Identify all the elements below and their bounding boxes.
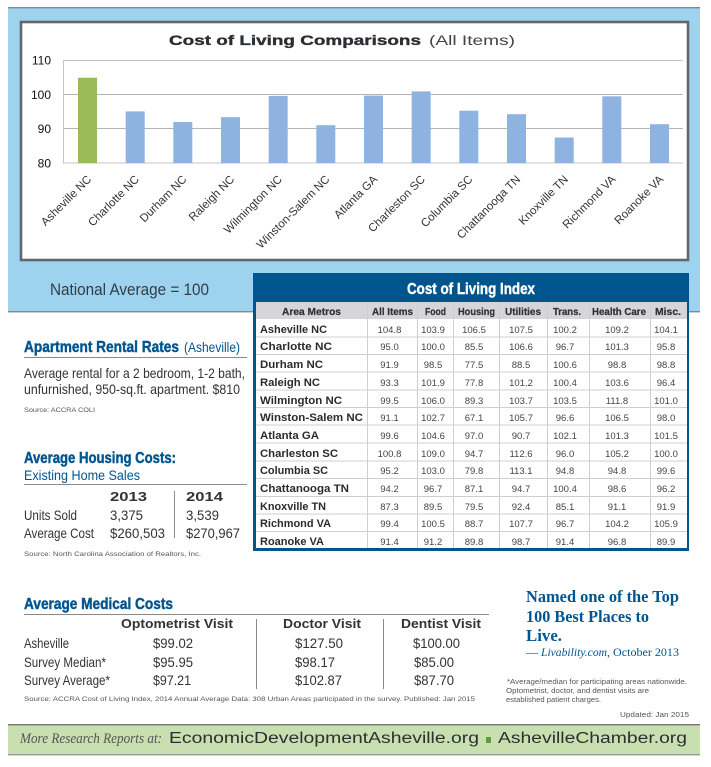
row: Knoxville TN — [260, 501, 675, 513]
chart grid lines — [63, 60, 683, 163]
row: Atlanta GA: 101.5 — [654, 431, 678, 442]
row: Roanoke VA: 96.8 — [608, 537, 626, 548]
row: Atlanta GA: 102.1 — [553, 431, 577, 442]
national average note: National Average = 100 — [50, 280, 209, 299]
row: Charleston SC: 100.8 — [378, 449, 401, 460]
row: Atlanta GA: 101.3 — [605, 431, 629, 442]
y axis labels: 100 — [31, 88, 51, 102]
footer link: chamber: AshevilleChamber.org — [498, 730, 687, 747]
row: Atlanta GA: 104.6 — [421, 431, 445, 442]
medical row: Asheville: $100.00 — [413, 635, 460, 651]
heading: average housing costs — [24, 450, 176, 483]
row: Wilmington NC: 99.5 — [380, 396, 399, 407]
row: Chattanooga TN: 98.6 — [608, 484, 626, 495]
heading: apartment rental rates: (Asheville) — [184, 339, 240, 355]
callout: top 100 best places: — — [525, 645, 539, 659]
row: Richmond VA: 105.9 — [654, 519, 678, 530]
y axis labels: 110 — [32, 54, 51, 68]
row: Chattanooga TN: 94.7 — [512, 484, 530, 495]
row: Raleigh NC: Raleigh NC — [260, 377, 320, 389]
row: Raleigh NC: 103.6 — [605, 378, 629, 389]
x axis city labels: Charleston SC — [366, 174, 428, 235]
x axis city labels: Winston-Salem NC — [255, 174, 332, 251]
row: Atlanta GA: 99.6 — [380, 431, 399, 442]
footnote: Optometrist, doctor, and dentist visits are — [506, 688, 649, 695]
row: Roanoke VA: 91.2 — [424, 537, 442, 548]
x axis city labels: Wilmington NC — [222, 174, 285, 236]
x axis city labels: Asheville NC — [39, 174, 94, 229]
heading: average housing costs: Existing Home Sales — [24, 467, 140, 483]
table column headers: Health Care — [592, 306, 646, 318]
chart title: Cost of Living Comparisons — [169, 33, 421, 48]
row: Charlotte NC: 106.6 — [509, 342, 533, 353]
row: Wilmington NC: 101.0 — [654, 396, 678, 407]
row: Roanoke VA: 91.4 — [380, 537, 399, 548]
row: Richmond VA: 99.4 — [380, 519, 399, 530]
housing source: Source: North Carolina Association of Realtors, Inc. — [24, 551, 201, 558]
medical table headers: Optometrist Visit — [121, 616, 234, 631]
row: Asheville NC: 104.1 — [654, 325, 678, 336]
row: Atlanta GA — [260, 430, 678, 442]
x axis city labels: Charlotte NC — [86, 174, 142, 229]
row: Chattanooga TN: 87.1 — [465, 484, 483, 495]
row: Wilmington NC: Wilmington NC — [260, 395, 342, 407]
row: Wilmington NC: 103.7 — [509, 396, 533, 407]
row: Charleston SC: 94.7 — [465, 449, 483, 460]
medical row: survey average — [24, 672, 454, 688]
callout: top 100 best places: Livability.com — [540, 645, 607, 659]
medical row: Asheville: $99.02 — [153, 635, 193, 651]
medical row: survey average: $87.70 — [414, 672, 454, 688]
row: Durham NC: 98.8 — [657, 360, 675, 371]
row: Charleston SC: Charleston SC — [260, 448, 338, 460]
rental source: Source: ACCRA COLI — [24, 407, 95, 414]
row: Knoxville TN: 91.1 — [608, 502, 626, 513]
housing table: 2013 — [110, 489, 147, 504]
row: Richmond VA: 104.2 — [605, 519, 629, 530]
row: Atlanta GA: 97.0 — [465, 431, 483, 442]
row: Atlanta GA: 90.7 — [512, 431, 530, 442]
row: Charleston SC: 112.6 — [509, 449, 533, 460]
row: Wilmington NC — [260, 395, 678, 407]
row: Asheville NC: 100.2 — [553, 325, 577, 336]
row: Charlotte NC: 85.5 — [465, 342, 483, 353]
row: Knoxville TN: 79.5 — [465, 502, 483, 513]
row: Charlotte NC: 100.0 — [421, 342, 445, 353]
row: Charleston SC: 100.0 — [654, 449, 678, 460]
x axis city labels: Roanoke VA — [613, 173, 666, 227]
table column headers: Trans. — [553, 306, 581, 318]
chart title — [169, 33, 515, 48]
row: Raleigh NC: 101.9 — [421, 378, 445, 389]
housing table: $260,503 — [110, 525, 165, 541]
row: Richmond VA: 107.7 — [509, 519, 533, 530]
table column headers: All Items — [372, 306, 413, 318]
row: Roanoke VA — [260, 536, 675, 548]
row: Columbia SC: 113.1 — [509, 466, 533, 477]
row: Durham NC: Durham NC — [260, 359, 323, 371]
row: Winston-Salem NC: 98.0 — [657, 413, 675, 424]
housing table: Average Cost — [24, 525, 94, 541]
panel: average medical costs — [24, 596, 489, 703]
row: Asheville NC — [260, 324, 678, 336]
row: Durham NC: 77.5 — [465, 360, 483, 371]
row: Richmond VA: 100.5 — [421, 519, 445, 530]
x axis city labels — [39, 173, 666, 251]
medical row: survey median: $85.00 — [414, 654, 454, 670]
medical row: survey average: $102.87 — [295, 672, 342, 688]
row: Winston-Salem NC: 106.5 — [605, 413, 629, 424]
medical source: Source: ACCRA Cost of Living Index, 2014 Annual Average Data: 308 Urban Areas participated in the survey. Published: Jan 2015 — [24, 696, 475, 703]
housing table: $270,967 — [186, 525, 240, 541]
row: Richmond VA: 96.7 — [556, 519, 574, 530]
footer band — [8, 724, 700, 755]
bars — [78, 78, 669, 163]
row: Columbia SC: 95.2 — [380, 466, 399, 477]
panel: average housing costs — [24, 450, 247, 558]
panel: bar chart frame — [21, 22, 688, 260]
row: Chattanooga TN: 100.4 — [553, 484, 577, 495]
row: Durham NC: 91.9 — [380, 360, 399, 371]
row: Durham NC: 98.8 — [608, 360, 626, 371]
table column headers: Utilities — [505, 306, 541, 318]
table column headers: Housing — [458, 306, 495, 318]
callout: top 100 best places: , October 2013 — [607, 645, 679, 659]
row: Richmond VA: Richmond VA — [260, 518, 331, 530]
row: Knoxville TN: Knoxville TN — [260, 501, 326, 513]
row: Asheville NC: 103.9 — [421, 325, 445, 336]
table column headers — [282, 306, 681, 318]
medical row: survey median: $95.95 — [153, 654, 193, 670]
row: Columbia SC: 94.8 — [608, 466, 626, 477]
footnote: *Average/median for participating areas nationwide. — [507, 679, 687, 686]
row: Asheville NC: 107.5 — [509, 325, 533, 336]
callout: top 100 best places — [525, 587, 679, 659]
footer lead-in: More Research Reports at: — [19, 731, 162, 747]
panel: cost of living index table — [253, 273, 689, 551]
row: Charlotte NC: 96.7 — [556, 342, 574, 353]
row: Knoxville TN: 89.5 — [424, 502, 442, 513]
row: Knoxville TN: 85.1 — [556, 502, 574, 513]
row: Winston-Salem NC: 91.1 — [380, 413, 399, 424]
row: Wilmington NC: 89.3 — [465, 396, 483, 407]
heading: average medical costs: Average Medical Costs — [24, 596, 173, 613]
row: Wilmington NC: 103.5 — [553, 396, 577, 407]
row: Asheville NC: 106.5 — [462, 325, 486, 336]
row: Knoxville TN: 87.3 — [380, 502, 399, 513]
row: Columbia SC: 103.0 — [421, 466, 445, 477]
footnote — [506, 679, 687, 704]
row: Durham NC: 98.5 — [424, 360, 442, 371]
table title: Cost of Living Index — [407, 281, 535, 298]
housing table: Units Sold — [24, 507, 77, 523]
row: Winston-Salem NC: 102.7 — [421, 413, 445, 424]
row: Winston-Salem NC: Winston-Salem NC — [260, 412, 363, 424]
row: Roanoke VA: 89.8 — [465, 537, 483, 548]
row: Charleston SC: 109.0 — [421, 449, 445, 460]
row: Asheville NC: 104.8 — [378, 325, 401, 336]
row: Raleigh NC — [260, 377, 675, 389]
medical table headers — [121, 616, 482, 631]
x axis city labels: Knoxville TN — [517, 174, 571, 228]
row: Winston-Salem NC — [260, 412, 675, 424]
medical row: survey median — [24, 654, 454, 670]
housing table — [24, 489, 240, 541]
table column headers: Misc. — [655, 306, 681, 318]
row: Raleigh NC: 100.4 — [553, 378, 577, 389]
row: Chattanooga TN: 96.7 — [424, 484, 442, 495]
table grid — [256, 302, 687, 548]
row: Chattanooga TN — [260, 483, 675, 495]
x axis city labels: Richmond VA — [561, 173, 619, 231]
row: Charlotte NC — [260, 341, 675, 353]
chart title: (All Items) — [429, 33, 515, 48]
footer separator square — [486, 737, 491, 743]
row: Durham NC: 100.6 — [553, 360, 577, 371]
y axis labels: 90 — [38, 122, 51, 136]
medical row: survey median: Survey Median* — [24, 654, 106, 670]
row: Atlanta GA: Atlanta GA — [260, 430, 319, 442]
row: Roanoke VA: 98.7 — [512, 537, 530, 548]
medical table headers: Doctor Visit — [283, 616, 362, 631]
row: Columbia SC: 99.6 — [657, 466, 675, 477]
y axis labels: 80 — [38, 156, 51, 170]
row: Durham NC — [260, 359, 675, 371]
row: Charlotte NC: Charlotte NC — [260, 341, 332, 353]
y axis labels — [31, 54, 51, 170]
row: Chattanooga TN: 96.2 — [657, 484, 675, 495]
row: Winston-Salem NC: 105.7 — [509, 413, 533, 424]
row: Asheville NC: 109.2 — [605, 325, 629, 336]
medical row: Asheville: $127.50 — [295, 635, 343, 651]
housing table: 3,539 — [186, 507, 219, 523]
table column headers: Food — [425, 306, 446, 318]
row: Roanoke VA: 91.4 — [556, 537, 574, 548]
housing table: 2014 — [186, 489, 224, 504]
panel: chart background — [8, 7, 700, 312]
row: Raleigh NC: 77.8 — [465, 378, 483, 389]
row: Charleston SC: 96.0 — [556, 449, 574, 460]
x axis city labels: Columbia SC — [419, 174, 475, 230]
callout: top 100 best places: Live. — [526, 626, 562, 645]
row: Charlotte NC: 95.0 — [380, 342, 399, 353]
row: Columbia SC: 79.8 — [465, 466, 483, 477]
row: Chattanooga TN: Chattanooga TN — [260, 483, 349, 495]
row: Chattanooga TN: 94.2 — [380, 484, 399, 495]
row: Columbia SC: Columbia SC — [260, 465, 328, 477]
housing table: 3,375 — [110, 507, 143, 523]
medical row: survey median: $98.17 — [295, 654, 335, 670]
heading: apartment rental rates: Apartment Rental Rates — [24, 339, 179, 356]
panel: apartment rental rates — [24, 339, 247, 414]
callout: top 100 best places: Named one of the Top — [526, 587, 679, 606]
row: Columbia SC: 94.8 — [556, 466, 574, 477]
row: Asheville NC: Asheville NC — [260, 324, 327, 336]
row: Raleigh NC: 101.2 — [509, 378, 533, 389]
rental description — [24, 365, 245, 397]
row: Raleigh NC: 93.3 — [380, 378, 399, 389]
row: Columbia SC — [260, 465, 675, 477]
row: Wilmington NC: 106.0 — [421, 396, 445, 407]
row: Richmond VA: 88.7 — [465, 519, 483, 530]
medical row: Asheville — [24, 635, 460, 651]
footer link: economic development: EconomicDevelopmentAsheville.org — [169, 730, 479, 747]
medical row: survey average: Survey Average* — [24, 672, 110, 688]
table column headers: Area Metros — [282, 306, 341, 318]
row: Roanoke VA: 89.9 — [657, 537, 675, 548]
row: Knoxville TN: 91.9 — [657, 502, 675, 513]
rental description: Average rental for a 2 bedroom, 1-2 bath, — [24, 365, 245, 381]
row: Raleigh NC: 96.4 — [657, 378, 675, 389]
row: Charlotte NC: 95.8 — [657, 342, 675, 353]
row: Knoxville TN: 92.4 — [512, 502, 530, 513]
x axis city labels: Durham NC — [138, 174, 189, 225]
updated date: Updated: Jan 2015 — [620, 712, 689, 719]
row: Wilmington NC: 111.8 — [606, 396, 628, 407]
row: Charlotte NC: 101.3 — [605, 342, 629, 353]
x axis city labels: Atlanta GA — [332, 173, 380, 221]
row: Durham NC: 88.5 — [512, 360, 530, 371]
row: Charleston SC — [260, 448, 678, 460]
medical row: Asheville: Asheville — [24, 635, 69, 651]
medical table headers: Dentist Visit — [401, 616, 482, 631]
medical row: survey average: $97.21 — [153, 672, 191, 688]
x axis city labels: Chattanooga TN — [455, 174, 523, 242]
row: Winston-Salem NC: 96.6 — [556, 413, 574, 424]
rental description: unfurnished, 950-sq.ft. apartment. $810 — [24, 381, 240, 397]
heading: average housing costs: Average Housing Costs: — [24, 450, 176, 467]
row: Roanoke VA: Roanoke VA — [260, 536, 324, 548]
row: Charleston SC: 105.2 — [605, 449, 629, 460]
x axis city labels: Raleigh NC — [187, 174, 237, 224]
footnote: established patient charges. — [506, 697, 601, 704]
row: Winston-Salem NC: 67.1 — [465, 413, 483, 424]
callout: top 100 best places: 100 Best Places to — [526, 607, 649, 626]
row: Richmond VA — [260, 518, 678, 530]
